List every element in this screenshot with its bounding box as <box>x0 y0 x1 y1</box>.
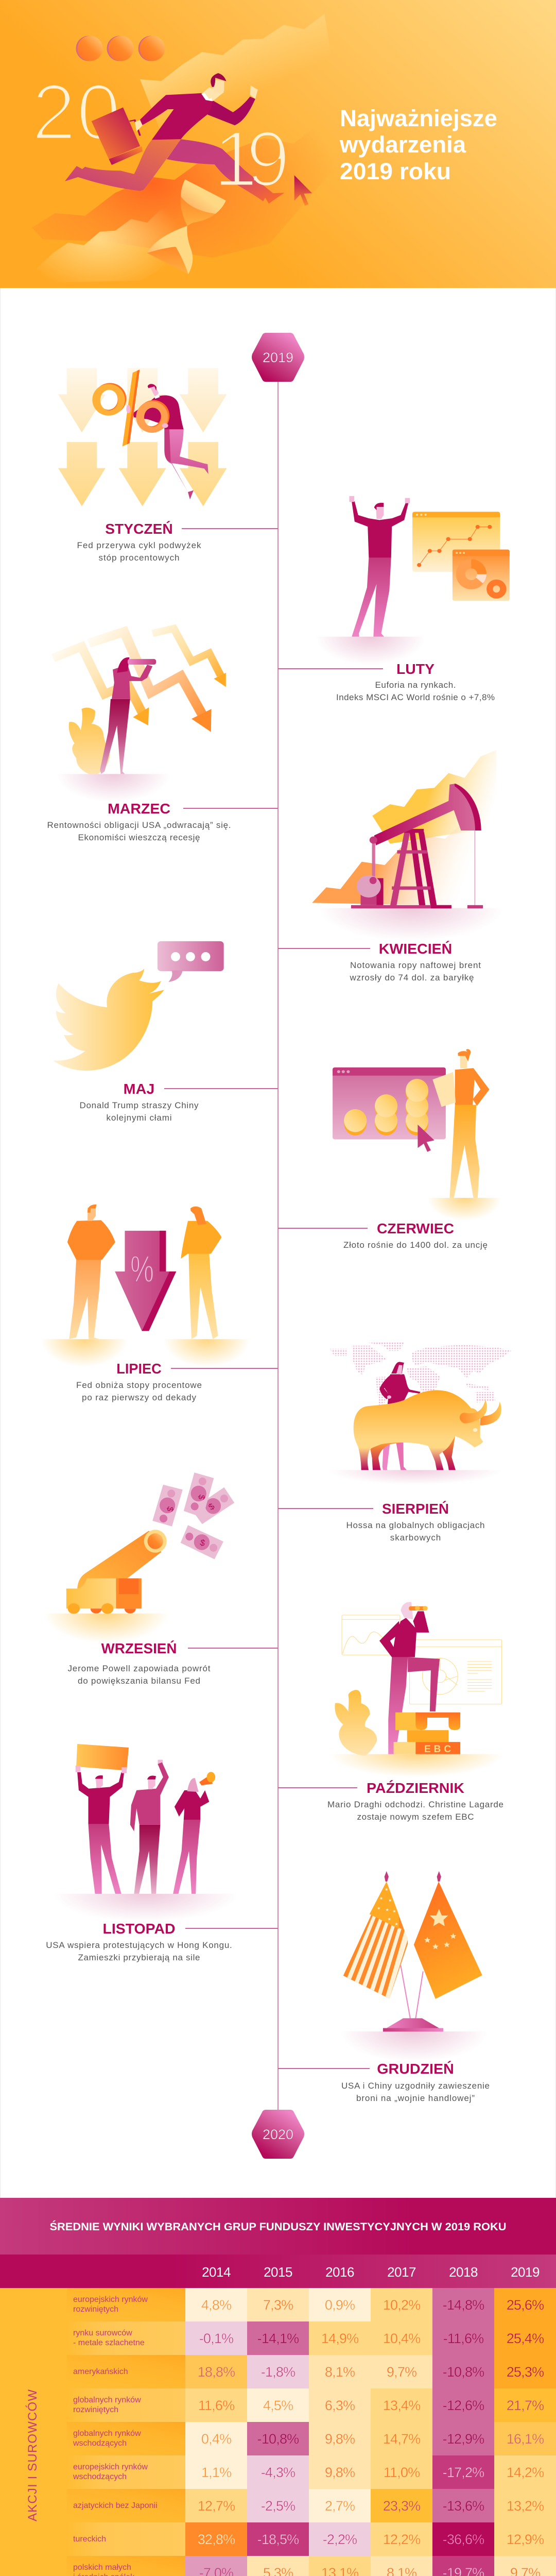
row: 25,4% <box>507 2331 544 2346</box>
description <box>76 1380 202 1402</box>
row <box>67 2355 556 2388</box>
row: -17,2% <box>443 2465 484 2480</box>
month heading: MARZEC <box>108 801 170 817</box>
row: 14,7% <box>383 2431 421 2447</box>
illustration: twitter bird with speech bubble <box>53 941 224 1071</box>
row: tureckich <box>73 2535 106 2544</box>
description: zostaje nowym szefem EBC <box>357 1812 474 1822</box>
illustration: oil pumpjack <box>312 750 503 941</box>
row: wschodzących <box>73 2439 127 2448</box>
row: -36,6% <box>443 2532 484 2547</box>
dollar signs on banknotes: $ <box>165 1506 176 1513</box>
group: akcji i surowców: AKCJI I SUROWCÓW <box>26 2389 40 2521</box>
row: 9,7% <box>387 2364 417 2380</box>
badge: 2019: 2019 <box>263 350 293 365</box>
row <box>67 2489 556 2522</box>
row: 23,3% <box>383 2498 421 2514</box>
panel: czerwiec <box>278 1049 502 1250</box>
icon: three coins <box>76 36 165 61</box>
row: -0,1% <box>199 2331 234 2346</box>
row: 1,1% <box>201 2465 232 2480</box>
description: Notowania ropy naftowej brent <box>350 960 481 970</box>
year digits 19: 19 <box>214 115 290 203</box>
description: Mario Draghi odchodzi. Christine Lagarde <box>327 1800 503 1809</box>
row: europejskich rynków <box>73 2463 148 2471</box>
illustration: money cannon truck <box>44 1472 234 1643</box>
row: -13,6% <box>443 2498 484 2514</box>
row: europejskich rynków <box>73 2295 148 2304</box>
description: USA i Chiny uzgodniły zawieszenie <box>341 2081 490 2091</box>
row: -14,1% <box>257 2331 299 2346</box>
row <box>67 2522 556 2556</box>
description <box>349 960 481 982</box>
year header row: 2019 <box>511 2264 540 2280</box>
row: 8,1% <box>325 2364 355 2380</box>
group: akcji i surowców <box>0 2288 556 2576</box>
panel: grudzień <box>278 1871 490 2103</box>
month heading: WRZESIEŃ <box>101 1640 177 1656</box>
month heading: PAŹDZIERNIK <box>367 1780 464 1796</box>
month heading: STYCZEŃ <box>105 521 173 537</box>
panel: maj <box>53 941 278 1123</box>
dollar signs on banknotes: $ <box>196 1494 207 1501</box>
running businessman with briefcase <box>65 73 284 204</box>
panel: header <box>0 0 556 288</box>
row: 12,9% <box>507 2532 544 2547</box>
row: 16,1% <box>507 2431 544 2447</box>
panel: sierpień <box>278 1342 511 1543</box>
row: 12,2% <box>383 2532 421 2547</box>
badge: 2020 <box>252 2110 304 2159</box>
month heading: GRUDZIEŃ <box>377 2061 454 2077</box>
illustration: Lagarde on ECB pedestal with binoculars <box>330 1602 503 1777</box>
row: 21,7% <box>507 2398 544 2413</box>
row: -18,5% <box>257 2532 299 2547</box>
row <box>67 2556 556 2576</box>
illustration: two people and falling percent arrow <box>41 1205 250 1367</box>
month heading: LUTY <box>396 661 435 677</box>
month heading: CZERWIEC <box>377 1221 454 1236</box>
pedestal letters: EBC <box>424 1744 454 1755</box>
description: Fed obniża stopy procentowe <box>76 1380 202 1390</box>
dollar signs on banknotes: $ <box>207 1501 217 1512</box>
description: stóp procentowych <box>99 553 179 563</box>
row: 9,8% <box>325 2431 355 2447</box>
row: 4,5% <box>263 2398 293 2413</box>
year digits 20: 20 <box>32 68 120 156</box>
row: 10,4% <box>383 2331 421 2346</box>
row: 14,9% <box>321 2331 359 2346</box>
row: globalnych rynków <box>73 2429 141 2438</box>
panel: styczeń <box>58 368 278 563</box>
description: kolejnymi cłami <box>106 1113 172 1123</box>
row: 4,8% <box>201 2297 232 2313</box>
description <box>79 1100 199 1123</box>
row: rozwiniętych <box>73 2305 118 2314</box>
description: Indeks MSCI AC World rośnie o +7,8% <box>336 692 495 702</box>
month heading: KWIECIEŃ <box>379 941 452 957</box>
illustration: woman beside gold coin chart <box>333 1049 502 1221</box>
row: 18,8% <box>198 2364 235 2380</box>
description <box>46 1940 232 1962</box>
month heading: MAJ <box>124 1081 154 1097</box>
description: Rentowności obligacji USA „odwracają” się. <box>47 820 231 830</box>
row: -2,2% <box>323 2532 357 2547</box>
description: USA wspiera protestujących w Hong Kongu. <box>46 1940 232 1950</box>
row: 14,2% <box>507 2465 544 2480</box>
description <box>336 680 495 702</box>
year header row: 2017 <box>387 2264 416 2280</box>
row: 13,4% <box>383 2398 421 2413</box>
title: wydarzenia <box>339 131 466 158</box>
row: 13,2% <box>507 2498 544 2514</box>
row: - metale szlachetne <box>73 2338 145 2347</box>
row: 10,2% <box>383 2297 421 2313</box>
row: 6,3% <box>325 2398 355 2413</box>
description: Euforia na rynkach. <box>375 680 456 690</box>
year header row: 2015 <box>264 2264 292 2280</box>
panel: fund results table <box>0 2198 556 2576</box>
page side hairlines <box>0 288 556 2198</box>
row: 11,6% <box>198 2398 235 2413</box>
panel: kwiecień <box>278 750 503 982</box>
row: -12,9% <box>443 2431 484 2447</box>
illustration: man carrying percent sign over down arrows <box>58 368 227 506</box>
year header row: 2018 <box>449 2264 478 2280</box>
row: rynku surowców <box>73 2329 132 2337</box>
row: -14,8% <box>443 2297 484 2313</box>
description: Jerome Powell zapowiada powrót <box>68 1664 211 1673</box>
row: 25,6% <box>507 2297 544 2313</box>
row: -11,6% <box>443 2331 484 2346</box>
description: Złoto rośnie do 1400 dol. za uncję <box>343 1240 488 1250</box>
description <box>68 1664 211 1686</box>
year header row: 2016 <box>325 2264 354 2280</box>
row: 2,7% <box>325 2498 355 2514</box>
icon: cursor arrow <box>294 175 312 206</box>
illustration: woman with bull <box>328 1362 503 1485</box>
table title <box>0 2198 556 2255</box>
row: 12,7% <box>198 2498 235 2514</box>
row: rozwiniętych <box>73 2405 118 2414</box>
badge: 2020: 2020 <box>263 2127 293 2142</box>
illustration: woman with telescope and falling arrows <box>53 629 226 802</box>
panel: luty <box>278 496 510 702</box>
row: wschodzących <box>73 2472 127 2481</box>
month heading: LISTOPAD <box>103 1921 175 1937</box>
row: -2,5% <box>261 2498 296 2514</box>
description: Donald Trump straszy Chiny <box>79 1100 199 1110</box>
row: 7,3% <box>263 2297 293 2313</box>
panel: lipiec <box>41 1205 278 1402</box>
illustration: protesters with sign and megaphone <box>53 1744 237 1922</box>
row: -12,6% <box>443 2398 484 2413</box>
description: wzrosły do 74 dol. za baryłkę <box>349 973 474 982</box>
row: 0,4% <box>201 2431 232 2447</box>
table title: ŚREDNIE WYNIKI WYBRANYCH GRUP FUNDUSZY INWESTYCYJNYCH W 2019 ROKU <box>49 2221 507 2233</box>
description: Ekonomiści wieszczą recesję <box>78 833 200 842</box>
illustration: man cheering beside chart windows <box>316 496 510 665</box>
description: Zamieszki przybierają na sile <box>78 1953 200 1962</box>
row: globalnych rynków <box>73 2396 141 2404</box>
month heading: SIERPIEŃ <box>382 1501 449 1517</box>
month heading: LIPIEC <box>116 1361 162 1377</box>
row: 11,0% <box>384 2465 420 2480</box>
row <box>67 2288 556 2321</box>
title: Najważniejsze <box>340 105 497 131</box>
illustration: world dot map <box>329 1342 511 1405</box>
row: 32,8% <box>198 2532 235 2547</box>
dollar signs on banknotes: $ <box>199 1537 206 1548</box>
panel: wrzesień <box>44 1472 278 1686</box>
row <box>67 2388 556 2422</box>
description <box>341 2081 490 2103</box>
panel: listopad <box>46 1744 278 1962</box>
row: 9,8% <box>325 2465 355 2480</box>
row: -10,8% <box>443 2364 484 2380</box>
row: -10,8% <box>257 2431 299 2447</box>
description: broni na „wojnie handlowej” <box>356 2093 475 2103</box>
description <box>346 1520 485 1543</box>
row: polskich małych <box>73 2563 131 2572</box>
row <box>67 2321 556 2355</box>
description <box>77 540 201 563</box>
description: Hossa na globalnych obligacjach <box>346 1520 485 1530</box>
year header row <box>0 2255 556 2288</box>
row <box>67 2455 556 2489</box>
description: Fed przerywa cykl podwyżek <box>77 540 201 550</box>
title: 2019 roku <box>340 158 451 184</box>
row: -1,8% <box>261 2364 296 2380</box>
panel: marzec <box>47 629 278 842</box>
description <box>327 1800 503 1822</box>
title <box>339 105 497 184</box>
dollar signs on banknotes <box>165 1494 217 1548</box>
row: amerykańskich <box>73 2367 128 2376</box>
description: do powiększania bilansu Fed <box>78 1676 200 1686</box>
description <box>47 820 231 842</box>
row: 25,3% <box>507 2364 544 2380</box>
description: skarbowych <box>390 1533 441 1543</box>
row: -4,3% <box>261 2465 296 2480</box>
row: azjatyckich bez Japonii <box>73 2501 158 2510</box>
badge: 2019 <box>252 333 304 382</box>
year header row: 2014 <box>202 2264 231 2280</box>
panel: październik <box>278 1602 503 1822</box>
illustration: USA and China desk flags <box>340 1871 488 2062</box>
timeline axis <box>277 382 279 2110</box>
row: 0,9% <box>325 2297 355 2313</box>
description: po raz pierwszy od dekady <box>82 1393 197 1402</box>
row <box>67 2422 556 2455</box>
percent symbol on arrow: % <box>130 1249 154 1290</box>
